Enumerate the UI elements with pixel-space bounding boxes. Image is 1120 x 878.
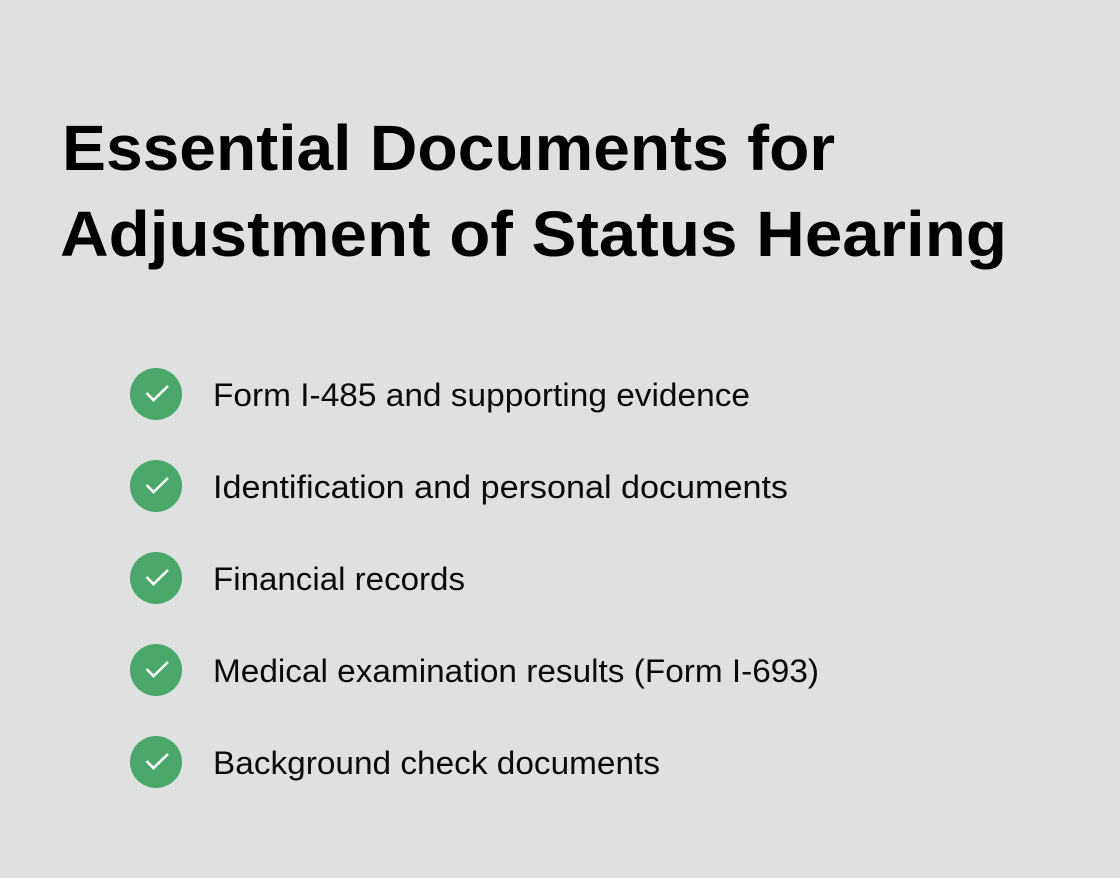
item: Financial records: Financial records <box>213 561 465 597</box>
item: Background check <box>130 736 660 788</box>
title: Essential Documents for <box>62 112 835 184</box>
checklist <box>130 368 819 788</box>
item: Form I-485 <box>130 368 750 420</box>
item: Medical examination <box>130 644 819 696</box>
item: Identification: Identification and personal documents <box>213 469 788 505</box>
title: Adjustment of Status Hearing <box>60 198 1007 270</box>
item: Medical examination: Medical examination results (Form I-693) <box>213 653 819 689</box>
item: Financial records <box>130 552 465 604</box>
title <box>60 112 1007 270</box>
item: Identification <box>130 460 788 512</box>
item: Background check: Background check documents <box>213 745 660 781</box>
item: Form I-485: Form I-485 and supporting evidence <box>213 377 750 413</box>
